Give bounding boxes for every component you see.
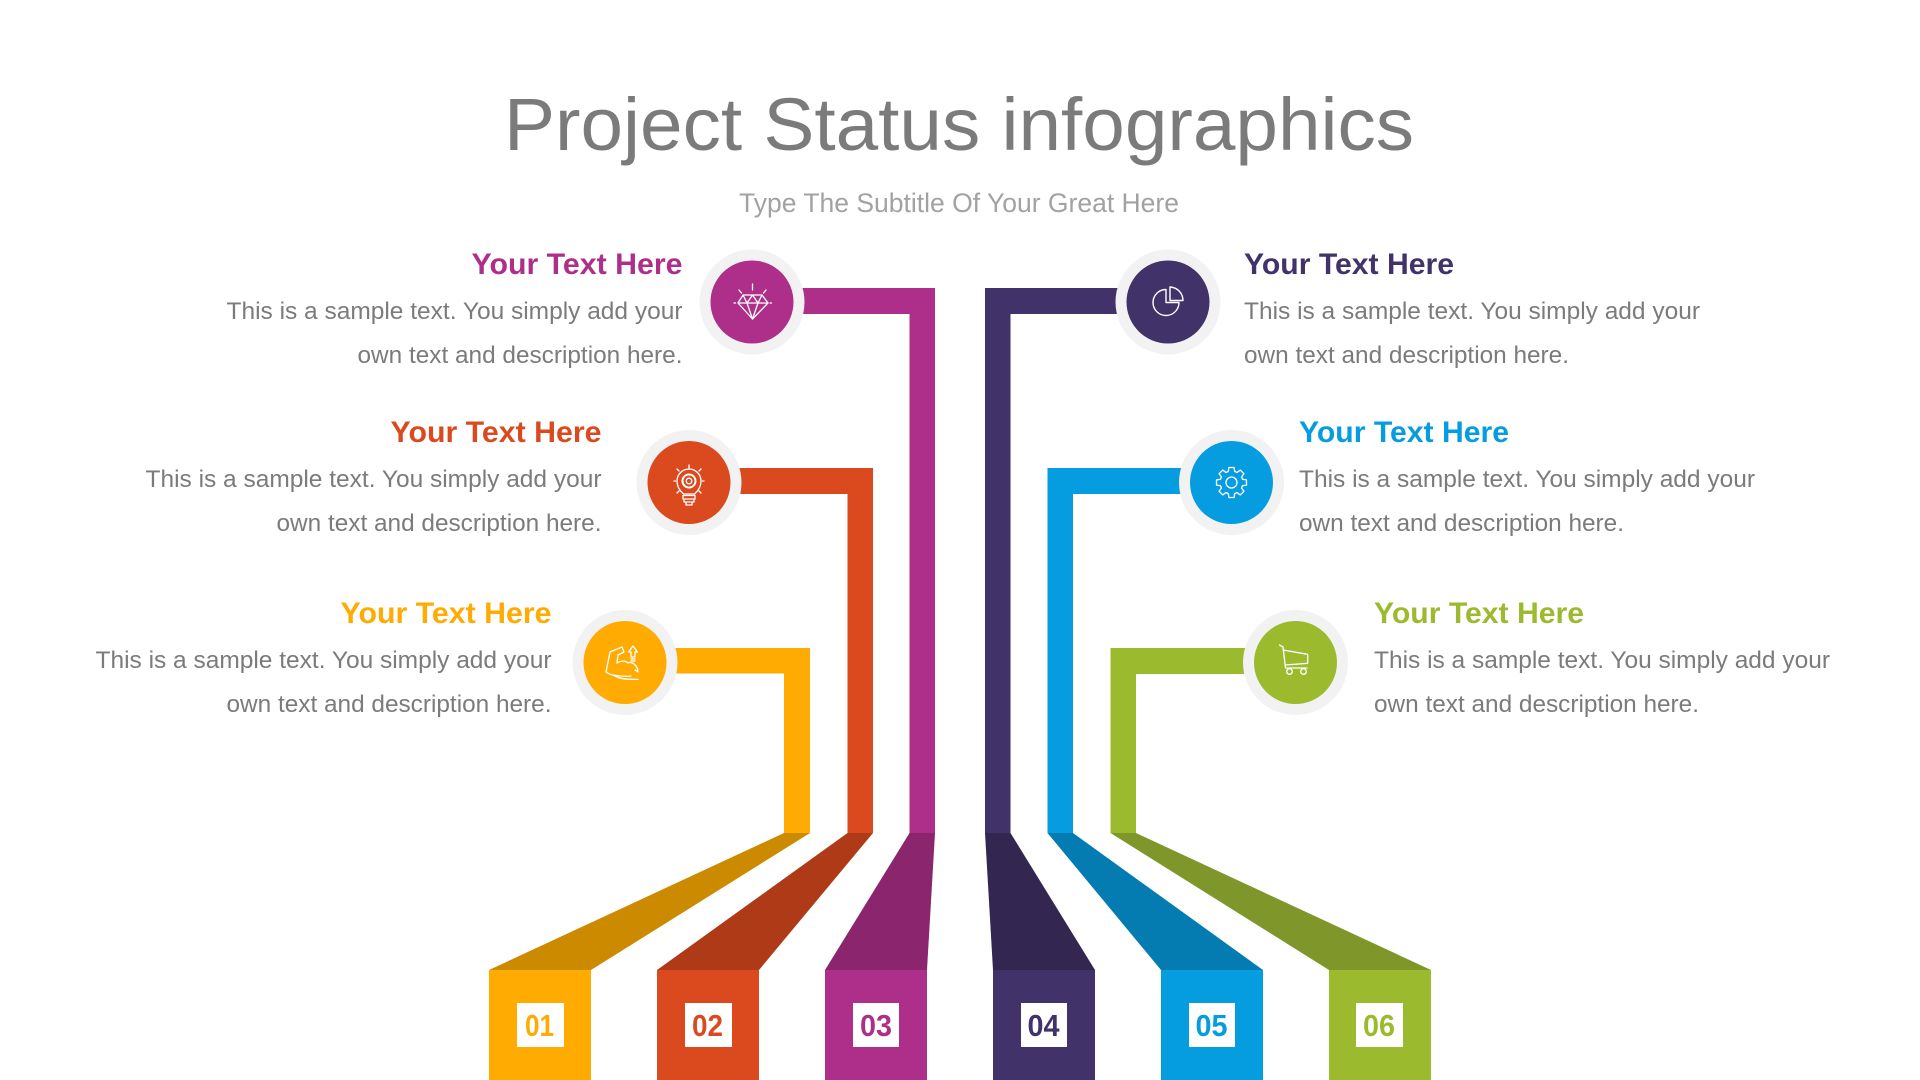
text block: purple, left top: This is a sample text. You simply add your bbox=[226, 298, 682, 325]
text block: yellow, left bottom: This is a sample text. You simply add your bbox=[96, 647, 552, 674]
number badge 03: 03 bbox=[860, 1008, 892, 1043]
text block: yellow, left bottom bbox=[96, 597, 552, 718]
icon: shopping cart bbox=[1243, 610, 1348, 715]
text block: indigo, right top: own text and description here. bbox=[1244, 342, 1569, 369]
text block: orange, left middle: Your Text Here bbox=[390, 416, 602, 449]
text block: blue, right middle: Your Text Here bbox=[1299, 416, 1509, 449]
number badge 04: 04 bbox=[1028, 1008, 1060, 1043]
connector 02: orange bbox=[657, 468, 873, 1080]
text block: orange, left middle: own text and description here. bbox=[276, 510, 602, 537]
text block: green, right bottom: Your Text Here bbox=[1374, 597, 1584, 630]
connector 01: yellow bbox=[489, 648, 810, 1080]
text block: green, right bottom: own text and description here. bbox=[1374, 691, 1699, 718]
text block: green, right bottom: This is a sample text. You simply add your bbox=[1374, 647, 1830, 674]
text block: purple, left top: own text and description here. bbox=[358, 342, 682, 369]
text block: purple, left top bbox=[226, 248, 682, 369]
text block: blue, right middle: own text and description here. bbox=[1299, 510, 1624, 537]
connector 05: blue bbox=[1048, 468, 1263, 1080]
icon: flexed arm with arrow bbox=[572, 610, 678, 715]
connector 06: green bbox=[1110, 648, 1431, 1080]
number badge 02 bbox=[685, 1003, 732, 1047]
text block: indigo, right top: Your Text Here bbox=[1244, 248, 1454, 281]
connector 04: indigo bbox=[985, 288, 1168, 1080]
connector 03: purple bbox=[752, 288, 935, 1080]
number badge 04 bbox=[1021, 1003, 1067, 1047]
number badge 06 bbox=[1356, 1003, 1403, 1047]
text block: orange, left middle bbox=[146, 416, 602, 537]
text block: purple, left top: Your Text Here bbox=[472, 248, 682, 281]
number badge 03 bbox=[853, 1003, 899, 1047]
number badge 05 bbox=[1189, 1003, 1235, 1047]
text block: indigo, right top bbox=[1244, 248, 1700, 369]
text block: orange, left middle: This is a sample text. You simply add your bbox=[146, 466, 602, 493]
number badge 01: 01 bbox=[525, 1008, 554, 1043]
number badge 01 bbox=[517, 1003, 564, 1047]
icon: lightbulb with gear bbox=[636, 430, 742, 535]
number badge 02: 02 bbox=[692, 1008, 723, 1043]
icon: pie chart bbox=[1116, 250, 1220, 354]
text block: blue, right middle bbox=[1299, 416, 1755, 537]
subtitle: Type The Subtitle Of Your Great Here bbox=[739, 188, 1179, 218]
text block: blue, right middle: This is a sample text. You simply add your bbox=[1299, 466, 1755, 493]
text block: yellow, left bottom: Your Text Here bbox=[340, 597, 552, 630]
text block: indigo, right top: This is a sample text. You simply add your bbox=[1244, 298, 1700, 325]
title: Project Status infographics bbox=[504, 83, 1414, 166]
text block: yellow, left bottom: own text and description here. bbox=[226, 691, 552, 718]
number badge 06: 06 bbox=[1363, 1008, 1395, 1043]
number badge 05: 05 bbox=[1196, 1008, 1228, 1043]
icon: diamond bbox=[700, 250, 804, 354]
text block: green, right bottom bbox=[1374, 597, 1830, 718]
icon: gear bbox=[1179, 430, 1284, 535]
